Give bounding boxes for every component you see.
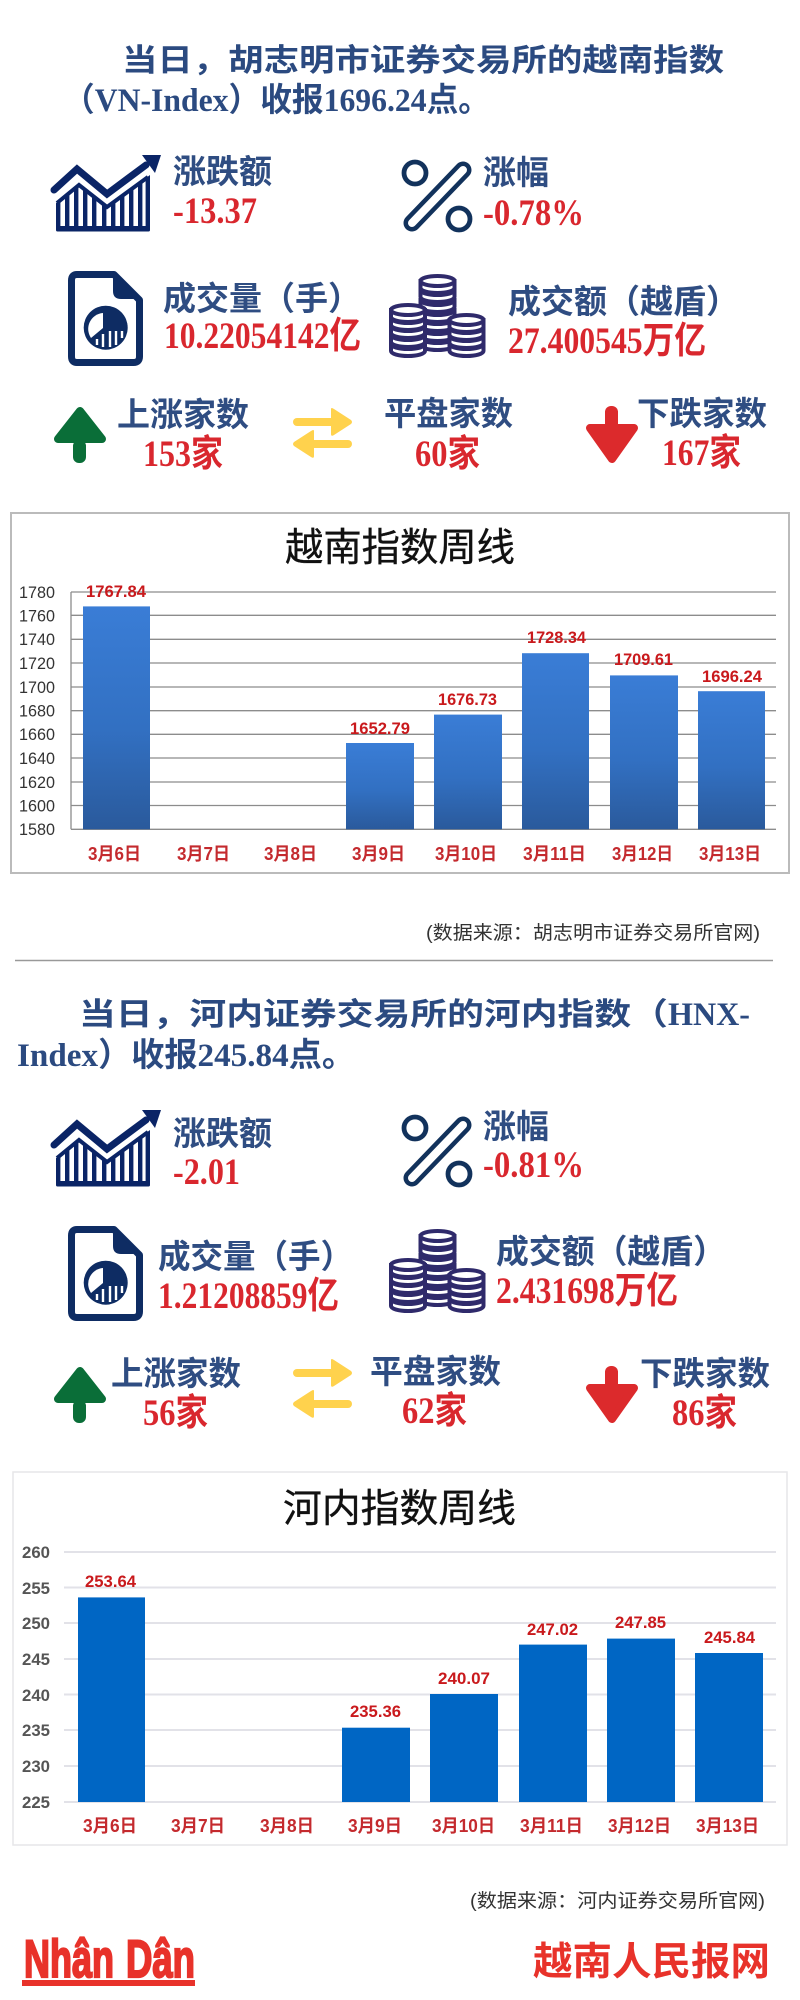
chart title: 河内指数周线 xyxy=(283,1488,516,1531)
x axis labels xyxy=(88,844,761,864)
stat: turnover: 成交额（越盾） xyxy=(508,283,739,320)
title: HNX-Index headline: HNX- xyxy=(668,997,750,1033)
icon: green up arrow xyxy=(58,411,102,463)
y axis labels: 260 xyxy=(22,1543,50,1562)
stat: volume: 1.21208859亿 xyxy=(158,1275,339,1317)
y axis labels: 1700 xyxy=(19,679,55,697)
stat: unchanged: 62家 xyxy=(402,1390,467,1432)
title: HNX-Index headline: Index）收报245.84点。 xyxy=(17,1037,355,1074)
stat: decliners xyxy=(640,1355,770,1434)
icon: rising chart xyxy=(54,155,161,232)
y axis labels: 250 xyxy=(22,1614,50,1633)
icon: rising chart xyxy=(54,1110,161,1186)
stat: advancers: 上涨家数 xyxy=(117,396,249,433)
stat: advancers: 上涨家数 xyxy=(111,1355,241,1392)
stat: decliners: 下跌家数 xyxy=(640,1355,770,1392)
y axis labels: 1720 xyxy=(19,655,55,673)
data labels: 253.64 xyxy=(85,1572,137,1591)
bars xyxy=(78,1597,763,1802)
stat: change percent: 涨幅 xyxy=(483,1108,549,1145)
icon: yellow two-way arrows xyxy=(293,408,352,458)
stat: turnover: 2.431698万亿 xyxy=(496,1270,678,1312)
y axis labels: 240 xyxy=(22,1686,50,1705)
data labels: 247.85 xyxy=(615,1613,666,1632)
panel: HNX-Index section xyxy=(13,997,787,1912)
x axis labels: 3月13日 xyxy=(696,1816,759,1836)
brand: Vietnamese People's Daily in Chinese: 越南人民报网 xyxy=(533,1941,770,1984)
data labels xyxy=(86,582,763,738)
x axis labels: 3月11日 xyxy=(520,1816,583,1836)
stat: change percent: -0.81% xyxy=(483,1145,584,1186)
stat: turnover: 成交额（越盾） xyxy=(496,1233,726,1270)
stat: change amount: 涨跌额 xyxy=(173,153,272,190)
x axis labels: 3月12日 xyxy=(608,1816,671,1836)
icon: yellow two-way arrows xyxy=(293,1359,352,1418)
y axis labels: 230 xyxy=(22,1757,50,1776)
bar chart: VN-Index weekly xyxy=(11,513,789,873)
bars xyxy=(83,606,765,829)
stat: change percent xyxy=(483,154,584,234)
data labels: 1728.34 xyxy=(527,628,587,647)
logo: Nhan Dan: Nhân xyxy=(24,1930,114,1989)
source note: HOSE: (数据来源：胡志明市证券交易所官网) xyxy=(426,922,760,944)
icon: green up arrow xyxy=(58,1371,102,1423)
x axis labels: 3月6日 xyxy=(83,1816,137,1836)
stat: unchanged xyxy=(384,395,513,475)
y axis labels: 1680 xyxy=(19,702,55,720)
y axis labels: 1760 xyxy=(19,608,55,626)
data labels: 1696.24 xyxy=(702,667,763,686)
stat: unchanged: 平盘家数 xyxy=(370,1353,501,1390)
stat: volume: 10.22054142亿 xyxy=(164,315,361,357)
x axis labels: 3月13日 xyxy=(699,844,761,864)
y axis labels: 1640 xyxy=(19,750,55,768)
title: VN-Index headline: 当日，胡志明市证券交易所的越南指数 xyxy=(122,43,724,78)
title: VN-Index headline xyxy=(63,43,724,119)
stat: change percent: 涨幅 xyxy=(483,154,549,191)
stat: unchanged xyxy=(370,1353,501,1432)
y axis labels xyxy=(22,1543,50,1812)
source note: HNX: (数据来源：河内证券交易所官网) xyxy=(470,1890,765,1912)
stat: volume xyxy=(158,1238,353,1317)
y axis labels: 1580 xyxy=(19,821,55,839)
stat: change percent xyxy=(483,1108,584,1186)
x axis labels xyxy=(83,1816,759,1836)
data labels: 1767.84 xyxy=(86,582,147,601)
title: VN-Index headline: （VN-Index）收报1696.24点。 xyxy=(63,82,490,119)
x axis labels: 3月10日 xyxy=(435,844,497,864)
data labels xyxy=(85,1572,756,1721)
data labels: 245.84 xyxy=(704,1628,756,1647)
data labels: 240.07 xyxy=(438,1669,490,1688)
x axis labels: 3月9日 xyxy=(352,844,405,864)
stat: decliners xyxy=(637,395,767,474)
data labels: 1709.61 xyxy=(614,650,673,669)
y axis labels: 1600 xyxy=(19,798,55,816)
x axis labels: 3月8日 xyxy=(264,844,317,864)
stat: unchanged: 60家 xyxy=(415,433,480,475)
data labels: 235.36 xyxy=(350,1702,401,1721)
stat: decliners: 下跌家数 xyxy=(637,395,767,432)
stat: change amount: 涨跌额 xyxy=(173,1115,272,1152)
y axis labels: 235 xyxy=(22,1721,50,1740)
data labels: 1652.79 xyxy=(350,719,410,738)
x axis labels: 3月6日 xyxy=(88,844,141,864)
stat: turnover xyxy=(496,1233,726,1312)
x axis labels: 3月11日 xyxy=(523,844,586,864)
stat: change amount: -2.01 xyxy=(173,1152,240,1193)
stat: volume: 成交量（手） xyxy=(163,280,361,317)
stat: advancers xyxy=(111,1355,241,1434)
x axis labels: 3月12日 xyxy=(612,844,673,864)
stat: decliners: 167家 xyxy=(662,432,741,474)
stat: turnover: 27.400545万亿 xyxy=(508,320,706,362)
x axis labels: 3月8日 xyxy=(260,1816,314,1836)
y axis labels: 245 xyxy=(22,1650,50,1669)
data labels: 1676.73 xyxy=(438,690,497,709)
y axis labels: 1660 xyxy=(19,726,55,744)
y axis labels xyxy=(19,584,55,839)
stat: turnover xyxy=(508,283,739,362)
y axis labels: 225 xyxy=(22,1793,50,1812)
y axis labels: 1620 xyxy=(19,774,55,792)
y axis labels: 1780 xyxy=(19,584,55,602)
stat: change amount: -13.37 xyxy=(173,191,257,232)
title: HNX-Index headline: 当日，河内证券交易所的河内指数（ xyxy=(79,997,668,1032)
stat: decliners: 86家 xyxy=(672,1392,737,1434)
x axis labels: 3月7日 xyxy=(177,844,230,864)
y axis labels: 1740 xyxy=(19,631,55,649)
stat: volume: 成交量（手） xyxy=(158,1238,353,1275)
x axis labels: 3月9日 xyxy=(348,1816,402,1836)
title: HNX-Index headline xyxy=(17,997,750,1074)
data labels: 247.02 xyxy=(527,1620,578,1639)
stat: change amount xyxy=(173,1115,272,1193)
icon: document with pie chart xyxy=(72,1230,141,1318)
stat: change amount xyxy=(173,153,272,232)
icon: coin stacks xyxy=(391,276,484,356)
stat: volume xyxy=(163,280,361,357)
icon: percent xyxy=(404,1117,470,1185)
x axis labels: 3月10日 xyxy=(432,1816,495,1836)
stat: advancers xyxy=(117,396,249,475)
bar chart: HNX-Index weekly xyxy=(13,1472,787,1845)
stat: advancers: 153家 xyxy=(143,433,223,475)
icon: coin stacks xyxy=(391,1231,484,1311)
stat: change percent: -0.78% xyxy=(483,193,584,234)
icon: percent xyxy=(404,162,470,230)
icon: red down arrow xyxy=(590,1366,634,1419)
chart title: 越南指数周线 xyxy=(285,527,515,570)
icon: document with pie chart xyxy=(72,274,141,362)
icon: red down arrow xyxy=(590,406,634,459)
x axis labels: 3月7日 xyxy=(171,1816,225,1836)
stat: advancers: 56家 xyxy=(143,1392,208,1434)
logo: Nhan Dan: Dân xyxy=(126,1930,195,1989)
y axis labels: 255 xyxy=(22,1579,50,1598)
stat: unchanged: 平盘家数 xyxy=(384,395,513,432)
panel: VN-Index section xyxy=(11,43,789,944)
